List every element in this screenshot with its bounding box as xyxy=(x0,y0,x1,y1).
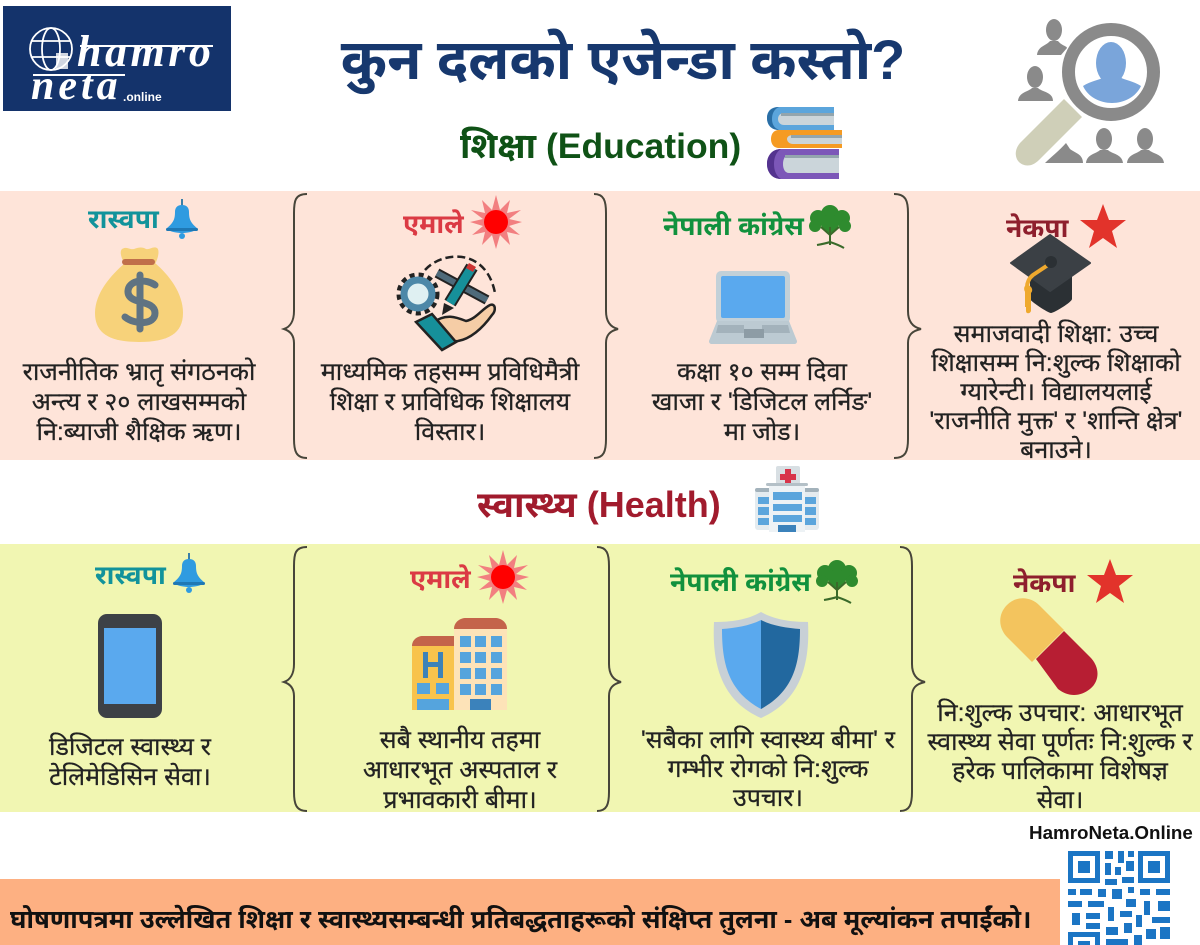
party: nepali congress: नेपाली कांग्रेस xyxy=(663,211,804,241)
text: rasvapa health xyxy=(48,732,212,791)
party: uml: एमाले xyxy=(403,209,464,239)
text: rasvapa education: राजनीतिक भ्रातृ संगठनको xyxy=(23,358,255,386)
text: rasvapa education: नि:ब्याजी शैक्षिक ऋण। xyxy=(36,418,242,446)
brace xyxy=(281,546,307,812)
icon: laptop xyxy=(709,271,797,344)
brace xyxy=(594,193,618,459)
heading: health: स्वास्थ्य (Health) xyxy=(477,484,721,525)
text: ncp education: ग्यारेन्टी। विद्यालयलाई xyxy=(960,378,1152,406)
text: rasvapa education: अन्त्य र २० लाखसम्मको xyxy=(32,388,246,416)
brace xyxy=(597,546,622,812)
text: ncp health xyxy=(927,698,1194,814)
icon: buildings xyxy=(412,618,507,710)
text: congress health: उपचार। xyxy=(733,784,803,812)
text: uml health: आधारभूत अस्पताल र xyxy=(363,756,557,784)
heading: education: शिक्षा (Education) xyxy=(460,126,741,166)
text: ncp health: हरेक पालिकामा विशेषज्ञ xyxy=(952,757,1168,785)
text: uml education xyxy=(320,357,580,446)
icon: books xyxy=(767,107,842,179)
brace xyxy=(894,193,922,459)
text: uml health: सबै स्थानीय तहमा xyxy=(380,726,540,754)
text: uml health: प्रभावकारी बीमा। xyxy=(383,786,537,814)
footer text: घोषणापत्रमा उल्लेखित शिक्षा र स्वास्थ्यसम्बन्धी प्रतिबद्धताहरूको संक्षिप्त तुलना - अब मूल्यांकन तपाईंको। xyxy=(10,906,1031,934)
text: ncp education: समाजवादी शिक्षा: उच्च xyxy=(954,320,1158,348)
icon: bell xyxy=(166,199,198,239)
text: congress education: खाजा र 'डिजिटल लर्निङ' xyxy=(652,388,872,416)
brace xyxy=(900,546,926,812)
icon: money bag xyxy=(95,247,183,342)
logo: Hamro Neta: .online xyxy=(123,90,162,104)
party: rasvapa: रास्वपा xyxy=(88,204,159,234)
party: nepali congress: नेपाली कांग्रेस xyxy=(670,567,811,597)
icon: graduation cap xyxy=(1010,234,1091,314)
text: uml education: विस्तार। xyxy=(415,418,485,446)
icon: sun xyxy=(477,550,529,604)
party: ncp: नेकपा xyxy=(1006,213,1068,243)
icon: tree xyxy=(816,560,858,604)
text: congress health xyxy=(641,725,896,812)
logo: Hamro Neta: hamro xyxy=(77,27,214,76)
party: rasvapa: रास्वपा xyxy=(95,560,166,590)
footer banner xyxy=(0,879,1060,945)
text: uml education: शिक्षा र प्राविधिक शिक्षालय xyxy=(330,388,570,416)
text: rasvapa health: टेलिमेडिसिन सेवा। xyxy=(49,763,211,791)
text: ncp education: शिक्षासम्म नि:शुल्क शिक्षाको xyxy=(931,349,1181,377)
text: congress education xyxy=(652,357,872,446)
brace xyxy=(281,193,307,459)
text: congress education: मा जोड। xyxy=(724,418,800,446)
title: कुन दलको एजेन्डा कस्तो? xyxy=(341,28,905,91)
logo: Hamro Neta xyxy=(3,6,231,111)
icon: hospital xyxy=(755,466,819,532)
party: ncp: नेकपा xyxy=(1013,568,1075,598)
panel: education xyxy=(0,191,1200,460)
text: congress health: 'सबैका लागि स्वास्थ्य बीमा' र xyxy=(641,726,895,754)
icon: star xyxy=(1080,204,1126,248)
text: ncp education xyxy=(930,319,1182,464)
qr code xyxy=(1068,851,1170,945)
text: ncp health: नि:शुल्क उपचार: आधारभूत xyxy=(937,699,1183,727)
text: rasvapa education xyxy=(22,357,256,446)
icon: tools in hand xyxy=(396,255,496,352)
icon: pill xyxy=(1000,598,1098,695)
text: ncp health: सेवा। xyxy=(1037,786,1083,814)
icon: sun xyxy=(470,195,522,249)
icon: star xyxy=(1087,559,1133,603)
text: congress health: गम्भीर रोगको नि:शुल्क xyxy=(668,755,868,783)
text: uml education: माध्यमिक तहसम्म प्रविधिमैत्री xyxy=(321,358,579,386)
text: ncp education: बनाउने। xyxy=(1020,436,1092,464)
text: congress education: कक्षा १० सम्म दिवा xyxy=(677,358,847,386)
text: uml health xyxy=(363,725,558,814)
panel: health xyxy=(0,544,1200,812)
logo: Hamro Neta: neta xyxy=(31,63,122,109)
icon: tree xyxy=(809,205,851,249)
icon: magnifier over people xyxy=(1016,19,1164,166)
icon: smartphone xyxy=(98,614,162,718)
text: rasvapa health: डिजिटल स्वास्थ्य र xyxy=(49,733,211,761)
text: ncp health: स्वास्थ्य सेवा पूर्णतः नि:शुल्क र xyxy=(927,728,1193,756)
text: ncp education: 'राजनीति मुक्त' र 'शान्ति क्षेत्र' xyxy=(930,407,1182,435)
icon: bell xyxy=(173,553,205,593)
site url: HamroNeta.Online xyxy=(1029,822,1193,843)
party: uml: एमाले xyxy=(410,564,471,594)
icon: shield xyxy=(714,612,808,718)
